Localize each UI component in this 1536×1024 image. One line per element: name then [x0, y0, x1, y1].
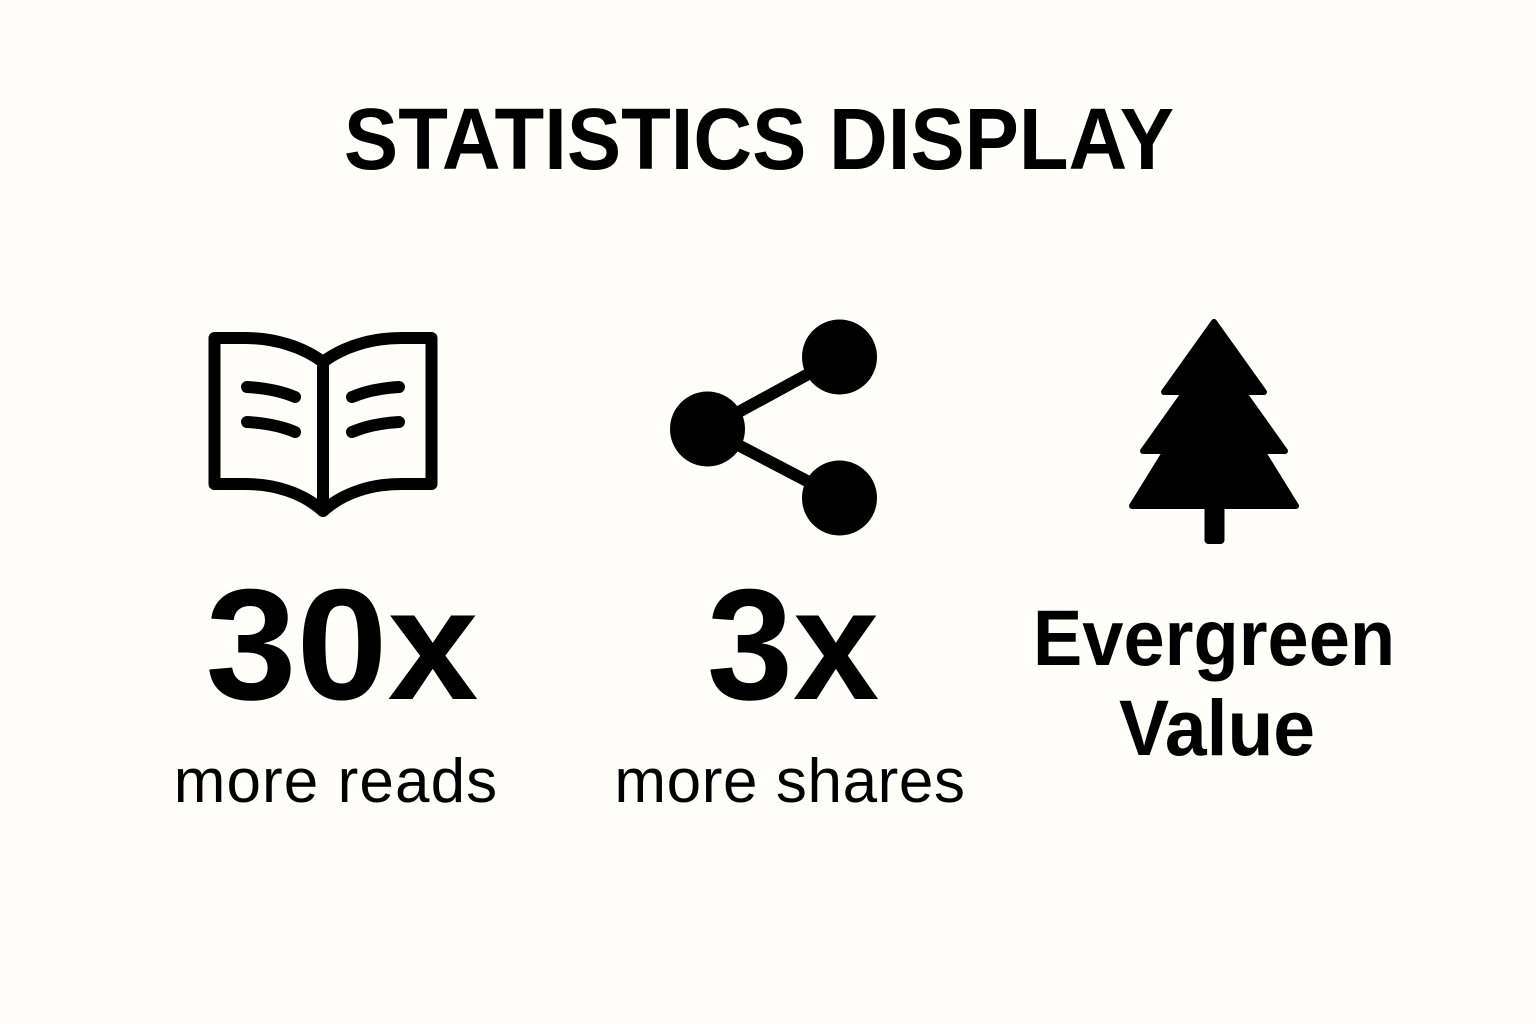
icon: open book [214, 338, 432, 511]
label: Evergreen: Evergreen [1033, 593, 1395, 682]
stat: 3x: 3x [707, 557, 879, 733]
icon: share [670, 320, 877, 536]
label: Value: Value [1119, 683, 1315, 772]
label: more shares: more shares [614, 747, 966, 816]
icon: evergreen tree [1132, 322, 1296, 544]
title: STATISTICS DISPLAY [344, 91, 1174, 188]
label: more reads: more reads [174, 747, 498, 816]
stat: 30x: 30x [206, 557, 478, 733]
